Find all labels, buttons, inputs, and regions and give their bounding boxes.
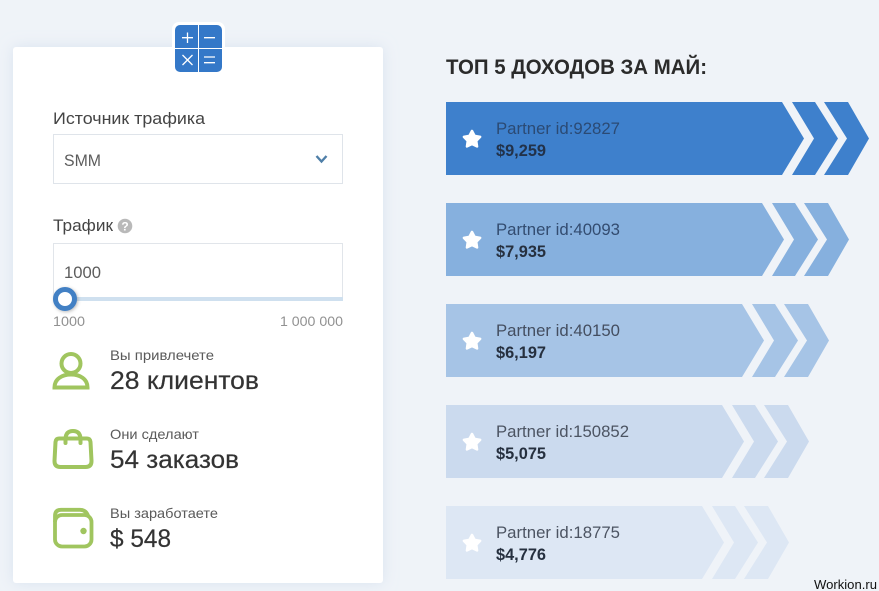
stat: orders: 54 заказов (110, 446, 239, 474)
dropdown: traffic source (54, 134, 342, 184)
stat: orders: Они сделают (110, 426, 200, 442)
icon: wallet (55, 510, 92, 546)
stat: clients: 28 клиентов (110, 367, 259, 395)
heading: top 5 incomes: ТОП 5 ДОХОДОВ ЗА МАЙ: (446, 55, 707, 79)
bar: partner 92827: Partner id:92827 (496, 119, 620, 138)
stat: earnings: Вы заработаете (110, 505, 218, 521)
icon: help (118, 219, 132, 234)
icon: help: ? (121, 220, 129, 234)
bar: partner 150852 (446, 405, 809, 478)
bar: partner 40150: Partner id:40150 (496, 321, 620, 340)
slider (53, 290, 343, 308)
slider max label: 1 000 000 (280, 313, 343, 329)
input: traffic value: 1000 (64, 263, 101, 282)
icon: shopping bag (54, 431, 92, 467)
label: traffic source: Источник трафика (53, 110, 206, 128)
bar: partner 40093 (446, 203, 849, 276)
bar: partner 40150: $6,197 (496, 344, 546, 362)
bar: partner 92827 (446, 102, 869, 175)
icon: person (54, 354, 88, 388)
label: traffic: Трафик (53, 217, 114, 235)
stat: earnings: $ 548 (110, 525, 171, 553)
stat: earnings (110, 505, 218, 553)
dropdown: traffic source: SMM (64, 151, 101, 170)
panel: calculator card (13, 22, 383, 583)
stat: orders (110, 426, 239, 474)
bar: partner 40150 (446, 304, 829, 377)
icon: calculator (172, 22, 225, 75)
input: traffic value (54, 244, 342, 298)
bar: partner 18775: $4,776 (496, 546, 546, 564)
bar: partner 150852: $5,075 (496, 445, 546, 463)
stat: clients: Вы привлечете (110, 347, 214, 363)
stat: clients (110, 347, 259, 395)
bar: partner 92827: $9,259 (496, 142, 546, 160)
bar: partner 18775 (446, 506, 789, 579)
bar: partner 18775: Partner id:18775 (496, 523, 620, 542)
slider min label: 1000 (53, 313, 85, 329)
bar: partner 40093: Partner id:40093 (496, 220, 620, 239)
bar: partner 40093: $7,935 (496, 243, 546, 261)
bar: partner 150852: Partner id:150852 (496, 422, 629, 441)
